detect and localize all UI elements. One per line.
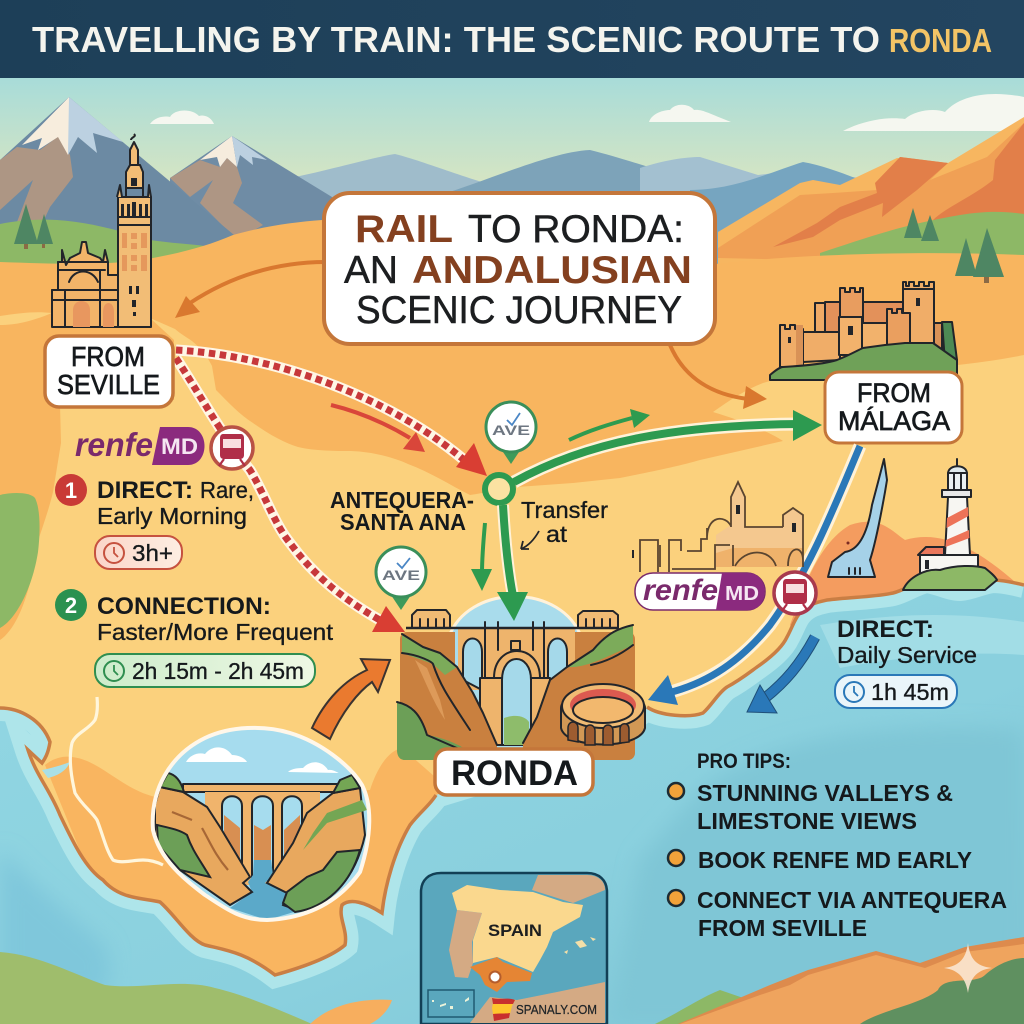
Antequera junction marker — [485, 475, 513, 503]
label: Transfer at: Transfer — [521, 497, 608, 523]
southern orange land — [45, 748, 450, 990]
inset map: Spain locator: SPAIN — [488, 922, 542, 940]
label: From Malaga: MÁLAGA — [838, 406, 950, 436]
panel: callout heading: ANDALUSIAN — [412, 249, 692, 292]
step 1: direct route — [55, 474, 254, 529]
icon: town skyline — [633, 482, 803, 572]
trees — [14, 204, 1004, 283]
route: green Antequera to Malaga — [514, 410, 822, 482]
left green patch — [0, 493, 40, 628]
text: direct daily service — [837, 616, 977, 668]
title: TRAVELLING BY TRAIN: THE SCENIC ROUTE TO — [32, 19, 880, 60]
icon: train Seville — [211, 427, 253, 469]
text: direct daily service: Daily Service — [837, 642, 977, 668]
small green arrows — [471, 409, 650, 591]
logo: renfe MD Seville: MD — [161, 434, 198, 459]
icon: Malaga Alcazaba castle — [770, 282, 957, 380]
small red direction arrow — [331, 405, 425, 452]
bottom right coastal hills — [655, 937, 1024, 1024]
label: From Seville: FROM — [71, 341, 145, 372]
panel: pro tips: STUNNING VALLEYS & — [697, 780, 953, 806]
far blue mountains — [290, 150, 860, 270]
sky background — [0, 78, 1024, 338]
orange patch by lighthouse — [790, 522, 1024, 640]
route: Seville to Ronda dashed — [176, 358, 405, 632]
icon: AVE pin Ronda: AVE — [382, 567, 420, 583]
left green hill — [0, 220, 205, 270]
label: Transfer at: at — [546, 521, 568, 547]
step 2: connection route — [55, 589, 334, 645]
label: From Seville — [45, 336, 173, 407]
inset: gorge bridge illustration — [153, 728, 369, 920]
arrow: callout to Malaga — [670, 345, 767, 409]
panel: callout heading: AN — [344, 249, 398, 292]
panel: pro tips: LIMESTONE VIEWS — [697, 808, 917, 834]
right orange hills — [718, 117, 1024, 270]
route: Seville to Antequera dashed — [176, 350, 487, 476]
sea — [0, 580, 1024, 1024]
step 2: connection route: 2 — [65, 593, 77, 618]
land base — [0, 220, 1024, 720]
southwest green land — [0, 952, 312, 1024]
icon: AVE pin junction: AVE — [492, 422, 530, 438]
step 2: connection route: CONNECTION: — [97, 593, 271, 620]
illustration: Ronda gorge and bridge — [397, 596, 635, 760]
pill: 3h+ duration — [95, 536, 182, 569]
logo: renfe MD Malaga: MD — [725, 583, 759, 605]
label: From Seville: SEVILLE — [57, 369, 160, 400]
logo: renfe MD Seville — [75, 426, 204, 465]
arrow: callout to Seville — [175, 262, 326, 318]
icon: AVE pin junction — [486, 402, 536, 464]
arrow: small blue down — [747, 637, 815, 713]
pill: 1h 45m duration: 1h 45m — [871, 679, 949, 705]
route: blue Malaga to Ronda — [648, 446, 860, 705]
panel: pro tips: PRO TIPS: — [697, 750, 791, 773]
step 1: direct route: Rare, — [200, 477, 254, 503]
icon: blue Malaga monument — [828, 459, 887, 577]
arrow: orange inset to Ronda — [312, 659, 390, 739]
pill: connection duration: 2h 15m - 2h 45m — [132, 658, 304, 684]
panel: callout heading — [324, 193, 715, 344]
icon: lighthouse — [903, 459, 997, 590]
pill: connection duration — [95, 654, 315, 687]
icon: train Malaga — [774, 572, 816, 614]
southern orange headland — [310, 1000, 392, 1024]
label: From Malaga — [825, 372, 962, 443]
sparkle icon — [944, 943, 992, 993]
logo: renfe MD Seville: renfe — [75, 426, 153, 463]
clouds — [150, 94, 1024, 131]
step 1: direct route: DIRECT: — [97, 477, 193, 504]
route: green Antequera to Ronda — [497, 505, 528, 621]
text: direct daily service: DIRECT: — [837, 616, 934, 643]
step 1: direct route: Early Morning — [97, 503, 247, 529]
panel: pro tips: BOOK RENFE MD EARLY — [698, 847, 972, 873]
inset map: Spain locator — [421, 873, 607, 1024]
illustration: bullring — [561, 684, 645, 745]
panel: pro tips: CONNECT VIA ANTEQUERA — [697, 887, 1007, 913]
panel: callout heading: RAIL — [355, 208, 453, 251]
header band — [0, 0, 1024, 78]
label: Ronda: RONDA — [451, 754, 578, 793]
lighter valley land — [0, 312, 1024, 720]
label: Antequera-Santa Ana: ANTEQUERA- — [330, 487, 474, 513]
icon: Seville Giralda and cathedral — [52, 134, 151, 327]
logo: renfe MD Malaga: renfe — [643, 574, 718, 607]
inset map: Spain locator: SPANALY.COM — [516, 1002, 597, 1017]
panel: pro tips — [668, 750, 1007, 941]
panel: callout heading: TO RONDA: — [468, 208, 684, 251]
step 1: direct route: 1 — [65, 478, 77, 503]
title: RONDA — [889, 22, 992, 59]
river white line — [70, 697, 163, 865]
label: Antequera-Santa Ana: SANTA ANA — [340, 509, 466, 535]
step 2: connection route: Faster/More Frequent — [97, 619, 334, 645]
left snow mountains — [0, 97, 340, 270]
panel: callout heading: SCENIC JOURNEY — [356, 289, 682, 332]
label: Ronda — [435, 749, 593, 795]
logo: renfe MD Malaga — [635, 573, 765, 610]
label: From Malaga: FROM — [857, 378, 931, 408]
panel: pro tips: FROM SEVILLE — [698, 915, 867, 941]
pill: 1h 45m duration — [835, 675, 957, 708]
icon: AVE pin Ronda — [376, 547, 426, 610]
pill: 3h+ duration: 3h+ — [132, 540, 173, 566]
label: Antequera-Santa Ana — [330, 487, 474, 535]
label: Transfer at — [521, 497, 608, 549]
